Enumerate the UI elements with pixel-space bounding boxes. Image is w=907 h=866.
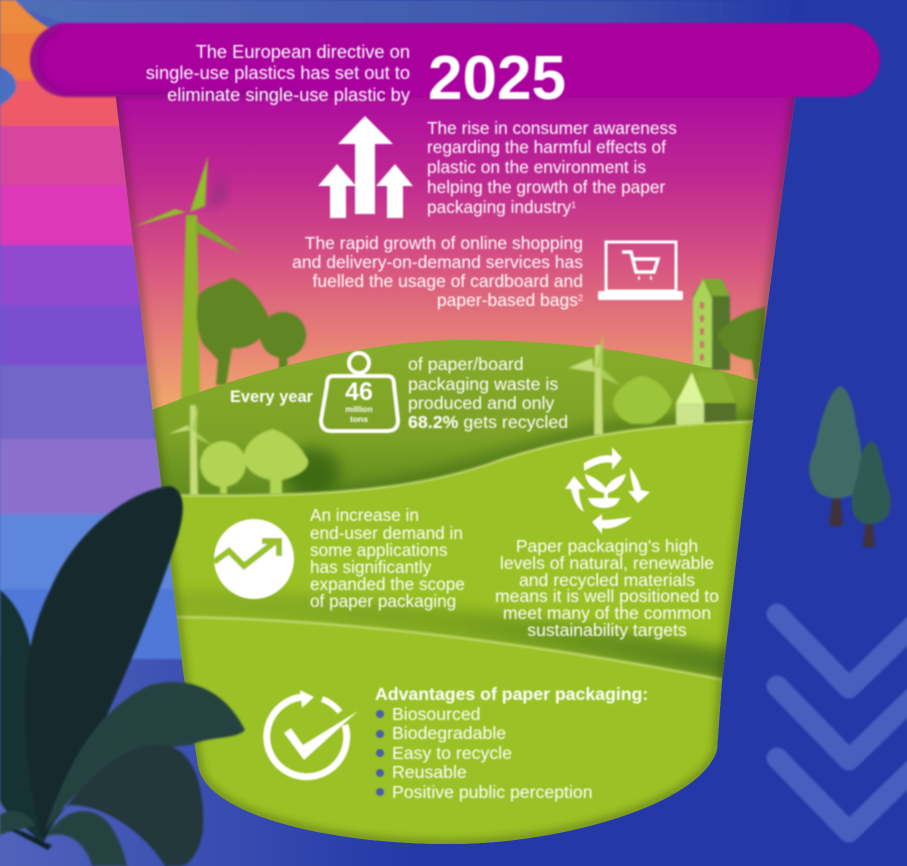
text: end-user demand: end-user demand in	[310, 523, 463, 543]
text: consumer awareness: packaging industry	[427, 197, 571, 217]
text: advantages list: Advantages of paper packaging:	[375, 684, 648, 704]
text: waste recycled: 68.2% gets recycled	[408, 412, 568, 432]
text: waste recycled: packaging waste is	[408, 374, 558, 394]
text: sustainability: sustainability targets	[527, 620, 687, 640]
text: every year: Every year	[230, 388, 314, 406]
text: sustainability: levels of natural, renewable	[500, 553, 714, 573]
bottom section	[170, 617, 730, 860]
text: sustainability	[495, 536, 719, 640]
text: end-user demand: some applications	[310, 540, 448, 560]
icon: recycle plant	[565, 447, 650, 534]
cup inner shadow	[115, 90, 796, 844]
icon: weight 46 million tons: million	[345, 404, 373, 414]
text: consumer awareness: regarding the harmful effects of	[427, 137, 666, 157]
text: online shopping	[292, 233, 583, 310]
text blocks	[146, 41, 719, 802]
text: European directive: eliminate single-use plastic by	[167, 84, 411, 105]
tower and tree right	[693, 279, 770, 380]
text: waste recycled: of paper/board	[408, 354, 524, 374]
text: online shopping: and delivery-on-demand services has	[292, 252, 583, 272]
text: end-user demand: of paper packaging	[310, 591, 456, 611]
trees on the right	[809, 386, 891, 547]
text: end-user demand	[310, 505, 465, 611]
text: advantages list	[375, 684, 648, 802]
icon: weight 46 million tons	[321, 353, 398, 431]
cup rim	[30, 23, 880, 97]
text: European directive: single-use plastics has set out to	[146, 62, 410, 83]
text: sustainability: and recycled materials	[519, 570, 695, 590]
icon: check circle	[267, 690, 358, 777]
text: European directive: The European directive on	[196, 41, 410, 62]
shadow band above bottom section	[170, 590, 740, 684]
text: sustainability: Paper packaging's high	[516, 536, 698, 556]
left coloured stripes	[0, 0, 800, 659]
text: advantages list: Positive public perception	[392, 782, 593, 802]
text: consumer awareness	[427, 118, 677, 217]
icon: weight 46 million tons: 46	[345, 378, 373, 406]
trees on the sky	[197, 278, 306, 385]
icon: laptop with cart	[598, 242, 683, 300]
middle hill	[150, 421, 765, 700]
text: waste recycled	[408, 354, 568, 432]
text: advantages list: Reusable	[392, 762, 467, 782]
tree shadow	[284, 448, 340, 496]
text: consumer awareness: 1	[571, 200, 576, 210]
hill back	[140, 340, 770, 520]
text: online shopping: The rapid growth of online shopping	[305, 233, 583, 253]
text: online shopping: 2	[578, 293, 583, 303]
wind turbine large	[133, 156, 243, 400]
text: advantages list: Biodegradable	[392, 723, 506, 743]
text: consumer awareness: plastic on the environment is	[427, 157, 646, 177]
hill shadow	[300, 420, 770, 500]
text: consumer awareness: helping the growth of the paper	[427, 177, 666, 197]
chevrons decoration	[777, 614, 907, 832]
text: advantages list: Biosourced	[392, 704, 480, 724]
text: consumer awareness: The rise in consumer awareness	[427, 118, 677, 138]
icon: weight 46 million tons: tons	[350, 414, 368, 424]
text: sustainability: meet many of the common	[503, 603, 711, 623]
icon: rising arrows	[318, 116, 413, 218]
text: online shopping: paper-based bags	[437, 290, 578, 310]
icon: growth chart circle	[214, 519, 294, 599]
text: end-user demand: has significantly	[310, 557, 432, 577]
text: advantages list: Easy to recycle	[392, 743, 512, 763]
text: online shopping: fuelled the usage of cardboard and	[313, 271, 583, 291]
heading: 2025: 2025	[428, 44, 566, 113]
paper cup	[116, 96, 796, 844]
text: end-user demand: expanded the scope	[310, 574, 465, 594]
text: waste recycled: produced and only	[408, 393, 554, 413]
text: European directive	[146, 41, 411, 105]
trees and turbines on hill	[168, 333, 736, 495]
text: end-user demand: An increase in	[310, 505, 419, 525]
plant leaves	[0, 486, 245, 866]
text: sustainability: means it is well positioned to	[495, 586, 719, 606]
